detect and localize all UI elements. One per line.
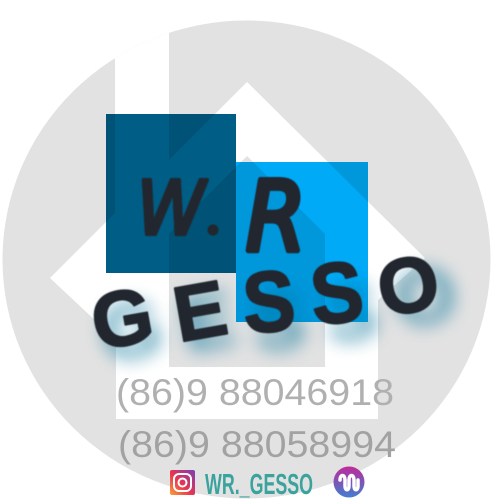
- GESSO wordmark: S: [306, 244, 368, 344]
- GESSO wordmark: [85, 237, 446, 367]
- logo initials W.R: R: [246, 161, 306, 273]
- logo initials W.R: W: [137, 166, 208, 252]
- white house outline: [50, 0, 425, 419]
- icon: instagram: [170, 470, 195, 495]
- phone number 1: (86)9 88046918: [116, 372, 394, 413]
- GESSO shadow glow: S: [250, 276, 308, 367]
- GESSO shadow glow: G: [94, 282, 169, 379]
- GESSO wordmark: E: [167, 263, 233, 359]
- GESSO wordmark: G: [85, 270, 160, 367]
- GESSO shadow glow: E: [175, 273, 241, 369]
- phone number 2: (86)9 88058994: [118, 424, 396, 465]
- GESSO shadow glow: O: [388, 248, 463, 345]
- GESSO shadow glow: [94, 248, 463, 379]
- inner grey house: [169, 156, 325, 367]
- logo initials W.R: [137, 161, 306, 273]
- GESSO wordmark: O: [371, 237, 446, 334]
- icon: circular messaging logo: [334, 466, 364, 498]
- logo block: light blue square: [236, 162, 368, 322]
- GESSO shadow glow: S: [321, 266, 382, 359]
- GESSO wordmark: S: [240, 253, 298, 352]
- logo block: dark blue square: [106, 114, 236, 273]
